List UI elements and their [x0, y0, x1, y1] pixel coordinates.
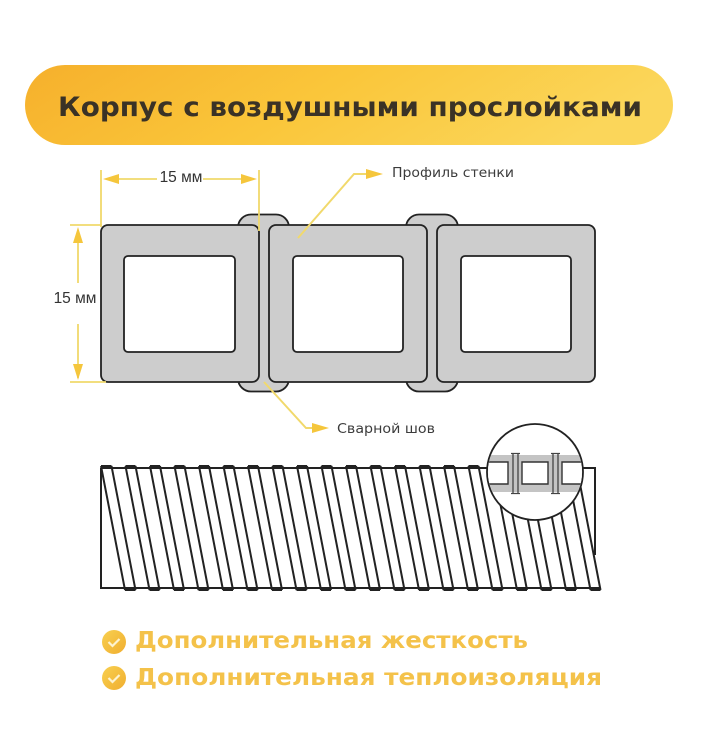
callout arrow: weld seam [264, 382, 435, 437]
magnified wall band [488, 455, 582, 492]
benefit 2 [102, 665, 602, 691]
height dimension 15 mm [54, 225, 106, 382]
height label: 15 мм [54, 290, 96, 307]
profile square 1 [101, 225, 259, 382]
weld seam right [406, 214, 458, 392]
callout label: weld seam: Сварной шов [337, 422, 435, 437]
width dimension 15 mm [101, 169, 259, 231]
spiral pipe [101, 424, 600, 590]
icon: check 1 [102, 630, 126, 654]
callout label: wall profile: Профиль стенки [392, 166, 514, 181]
icon: check 2 [102, 666, 126, 690]
profile square 2 [269, 225, 427, 382]
benefit text 2: Дополнительная теплоизоляция [135, 665, 602, 691]
spiral ribs [101, 466, 600, 590]
benefit 1 [102, 628, 528, 654]
magnifier lens [480, 424, 590, 520]
magnified welds [511, 454, 560, 494]
title banner [25, 65, 673, 145]
width label: 15 мм [160, 169, 202, 186]
callout arrow: wall profile [298, 166, 514, 238]
benefit text 1: Дополнительная жесткость [135, 628, 528, 654]
weld seam left [238, 214, 289, 392]
title text: Корпус с воздушными прослойками [58, 92, 642, 123]
profile square 3 [437, 225, 595, 382]
profile cross-section [101, 214, 595, 392]
